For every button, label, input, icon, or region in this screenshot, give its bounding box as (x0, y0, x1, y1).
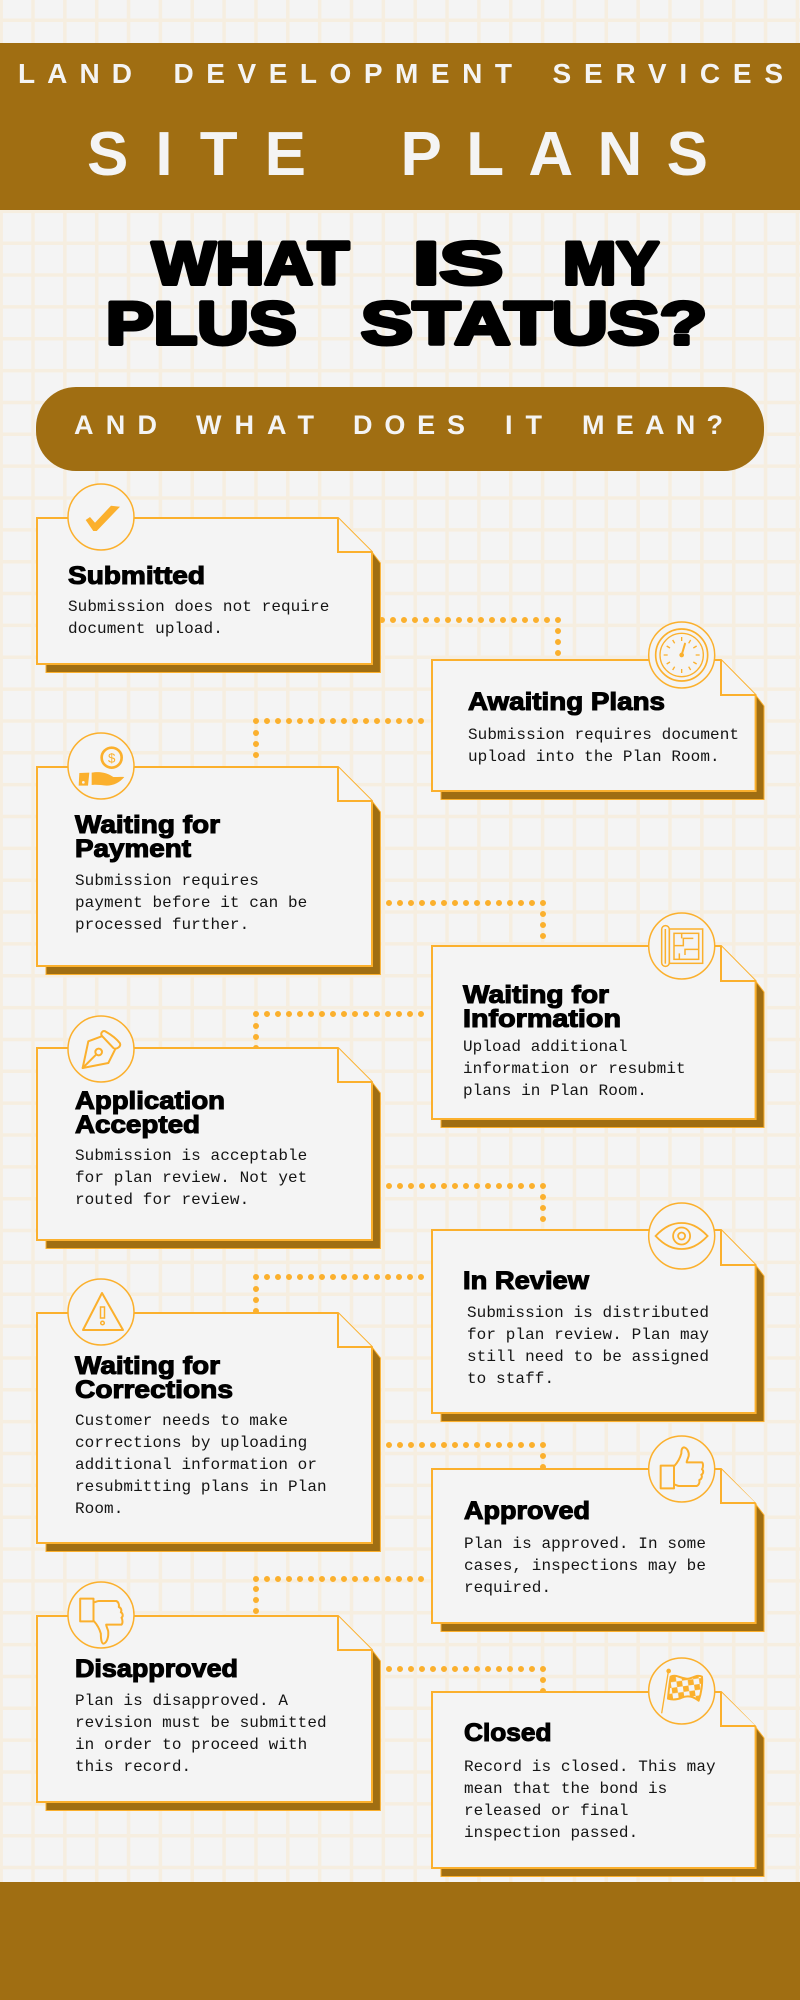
panel: Awaiting Plans (432, 622, 764, 800)
description: inspection passed. (464, 1824, 638, 1842)
icon: check mark (68, 484, 134, 550)
subtitle pill: WHAT (196, 410, 314, 440)
description: upload into the Plan Room. (468, 748, 720, 766)
connector: submitted to awaiting plans (382, 620, 558, 654)
heading (75, 1087, 225, 1139)
description: still need to be assigned (467, 1348, 709, 1366)
description: Record is closed. This may (464, 1758, 716, 1776)
heading: Corrections (75, 1376, 233, 1404)
panel: Application Accepted (37, 1016, 380, 1248)
icon: hand with coin (68, 733, 134, 799)
connector: application accepted to in review (389, 1186, 544, 1220)
title: WHAT (152, 230, 349, 297)
section heading (87, 120, 708, 189)
connector: waiting for information to application accepted (256, 1014, 430, 1048)
description: document upload. (68, 620, 223, 638)
section heading: SITE (87, 120, 306, 189)
panel: Disapproved (37, 1582, 380, 1810)
heading: Waiting for (463, 981, 609, 1009)
icon: thumbs down (68, 1582, 134, 1648)
icon: blueprint (649, 913, 715, 979)
connector: waiting for corrections to approved (389, 1445, 544, 1468)
title (106, 230, 707, 357)
icon: pen nib (68, 1016, 134, 1082)
department heading: SERVICES (552, 58, 783, 89)
section heading: PLANS (400, 120, 708, 189)
description: Upload additional (463, 1038, 628, 1056)
description: information or resubmit (463, 1060, 686, 1078)
panel: Waiting for Payment (37, 733, 380, 974)
subtitle pill: IT (505, 410, 542, 440)
heading: Information (463, 1005, 621, 1033)
heading: Payment (75, 835, 192, 863)
description: Room. (75, 1500, 123, 1518)
description: Submission requires document (468, 726, 739, 744)
connector: in review to waiting for corrections (256, 1277, 424, 1312)
icon: clock (649, 622, 715, 688)
icon: eye (649, 1203, 715, 1269)
footer band (0, 1882, 800, 2000)
header band (0, 43, 800, 210)
subtitle pill (36, 387, 764, 471)
description: released or final (464, 1802, 629, 1820)
connector: disapproved to closed (389, 1669, 544, 1692)
heading: Accepted (75, 1111, 200, 1139)
description: plans in Plan Room. (463, 1082, 647, 1100)
heading: Waiting for (75, 1352, 220, 1380)
subtitle pill: MEAN? (582, 410, 723, 440)
description: Submission does not require (68, 598, 329, 616)
heading: Application (75, 1087, 225, 1115)
title: IS (413, 230, 503, 297)
title: PLUS (106, 290, 296, 357)
panel: Closed (432, 1658, 764, 1876)
connector: waiting for payment to waiting for information (389, 903, 544, 936)
description: required. (464, 1579, 551, 1597)
heading: Submitted (68, 562, 205, 590)
description: payment before it can be (75, 894, 307, 912)
subtitle pill: DOES (353, 410, 465, 440)
heading: Closed (464, 1719, 552, 1747)
description: processed further. (75, 916, 249, 934)
department heading: LAND (18, 58, 132, 89)
description: additional information or (75, 1456, 317, 1474)
heading: Disapproved (75, 1655, 238, 1683)
panel: Approved (432, 1436, 764, 1632)
heading: Awaiting Plans (468, 688, 665, 716)
description: this record. (75, 1758, 191, 1776)
description: for plan review. Not yet (75, 1169, 307, 1187)
connector: awaiting plans to waiting for payment (256, 721, 430, 756)
description: Submission requires (75, 872, 259, 890)
description: for plan review. Plan may (467, 1326, 709, 1344)
connector: approved to disapproved (256, 1579, 424, 1612)
panel: Waiting for Corrections (37, 1279, 380, 1552)
panel: In Review (432, 1203, 764, 1422)
description: corrections by uploading (75, 1434, 307, 1452)
subtitle pill: AND (74, 410, 157, 440)
heading (75, 811, 220, 863)
description: routed for review. (75, 1191, 249, 1209)
heading: Waiting for (75, 811, 220, 839)
heading: Approved (464, 1497, 590, 1525)
heading: In Review (463, 1267, 590, 1295)
title: STATUS? (361, 290, 707, 357)
description: resubmitting plans in Plan (75, 1478, 327, 1496)
description: Submission is acceptable (75, 1147, 307, 1165)
description: cases, inspections may be (464, 1557, 706, 1575)
description: Submission is distributed (467, 1304, 709, 1322)
icon: thumbs up (649, 1436, 715, 1502)
panel: Waiting for Information (432, 913, 764, 1128)
panel: Submitted (37, 484, 380, 672)
department heading (18, 58, 783, 89)
description: revision must be submitted (75, 1714, 327, 1732)
department heading: DEVELOPMENT (174, 58, 512, 89)
description: in order to proceed with (75, 1736, 307, 1754)
description: to staff. (467, 1370, 554, 1388)
heading (463, 981, 621, 1033)
icon: warning triangle (68, 1279, 134, 1345)
description: Customer needs to make (75, 1412, 288, 1430)
description: Plan is disapproved. A (75, 1692, 288, 1710)
icon: hand with coin: $ (108, 750, 116, 765)
description: Plan is approved. In some (464, 1535, 706, 1553)
heading (75, 1352, 233, 1404)
icon: checkered flag (649, 1658, 715, 1724)
title: MY (563, 230, 659, 297)
description: mean that the bond is (464, 1780, 667, 1798)
